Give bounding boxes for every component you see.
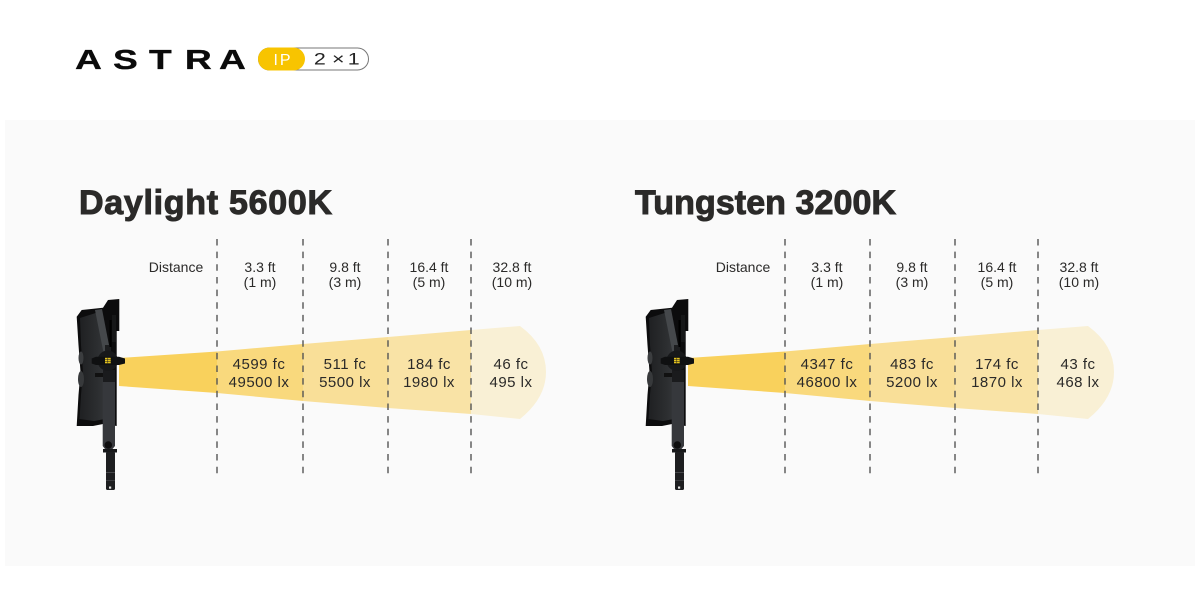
column: 3 m: (3 m) [329,274,361,290]
logo pill: IP [273,52,293,69]
column: 1 m: (1 m) [244,274,276,290]
distance label: Distance [716,259,770,275]
heading: daylight: Daylight 5600K [79,184,332,222]
icon: light fixture [646,299,694,490]
column: 1 m: (1 m) [811,274,843,290]
column: 3 m: 511 fc [324,356,366,373]
background panel [5,120,1195,566]
column: 1 m: 3.3 ft [811,259,843,275]
column: 5 m [971,259,1023,391]
panel: daylight 5600K [77,184,546,490]
panel: tungsten 3200K [635,184,1114,490]
column: 3 m [886,259,938,391]
column: 3 m: 483 fc [890,356,934,373]
column: 5 m: 16.4 ft [978,259,1017,275]
column: 10 m: 32.8 ft [493,259,532,275]
column: 1 m: 4347 fc [801,356,853,373]
logo pill [258,48,368,70]
column: 10 m: 43 fc [1060,356,1096,373]
column: 3 m: 5500 lx [319,374,371,391]
column: 10 m [489,259,533,391]
column: 5 m: (5 m) [981,274,1013,290]
column: 3 m: 9.8 ft [896,259,928,275]
light beam [688,326,1114,419]
column: 10 m: 46 fc [493,356,529,373]
icon: light fixture [77,299,125,490]
column: 1 m [229,259,289,391]
column: 1 m: 3.3 ft [244,259,276,275]
column: 5 m: (5 m) [413,274,445,290]
column: 1 m: 46800 lx [797,374,857,391]
logo: ASTRA IP 2x1 [75,44,369,75]
column: 3 m: (3 m) [896,274,928,290]
distance dividers [217,239,471,474]
column: 5 m: 1980 lx [403,374,455,391]
column: 1 m [797,259,857,391]
heading: tungsten: Tungsten 3200K [635,184,896,222]
column: 5 m: 16.4 ft [410,259,449,275]
column: 3 m: 9.8 ft [329,259,361,275]
column: 10 m: 468 lx [1056,374,1100,391]
column: 10 m: (10 m) [1059,274,1099,290]
column: 10 m [1056,259,1100,391]
column: 5 m [403,259,455,391]
column: 5 m: 184 fc [407,356,451,373]
logo pill: 2×1 [314,51,360,69]
logo wordmark: ASTRA [75,44,246,75]
column: 1 m: 49500 lx [229,374,289,391]
light beam [119,326,546,419]
distance dividers [785,239,1038,474]
column: 10 m: (10 m) [492,274,532,290]
column: 3 m: 5200 lx [886,374,938,391]
distance label: Distance [149,259,203,275]
column: 10 m: 32.8 ft [1060,259,1099,275]
column: 1 m: 4599 fc [233,356,285,373]
column: 5 m: 1870 lx [971,374,1023,391]
column: 5 m: 174 fc [975,356,1019,373]
column: 3 m [319,259,371,391]
column: 10 m: 495 lx [489,374,533,391]
